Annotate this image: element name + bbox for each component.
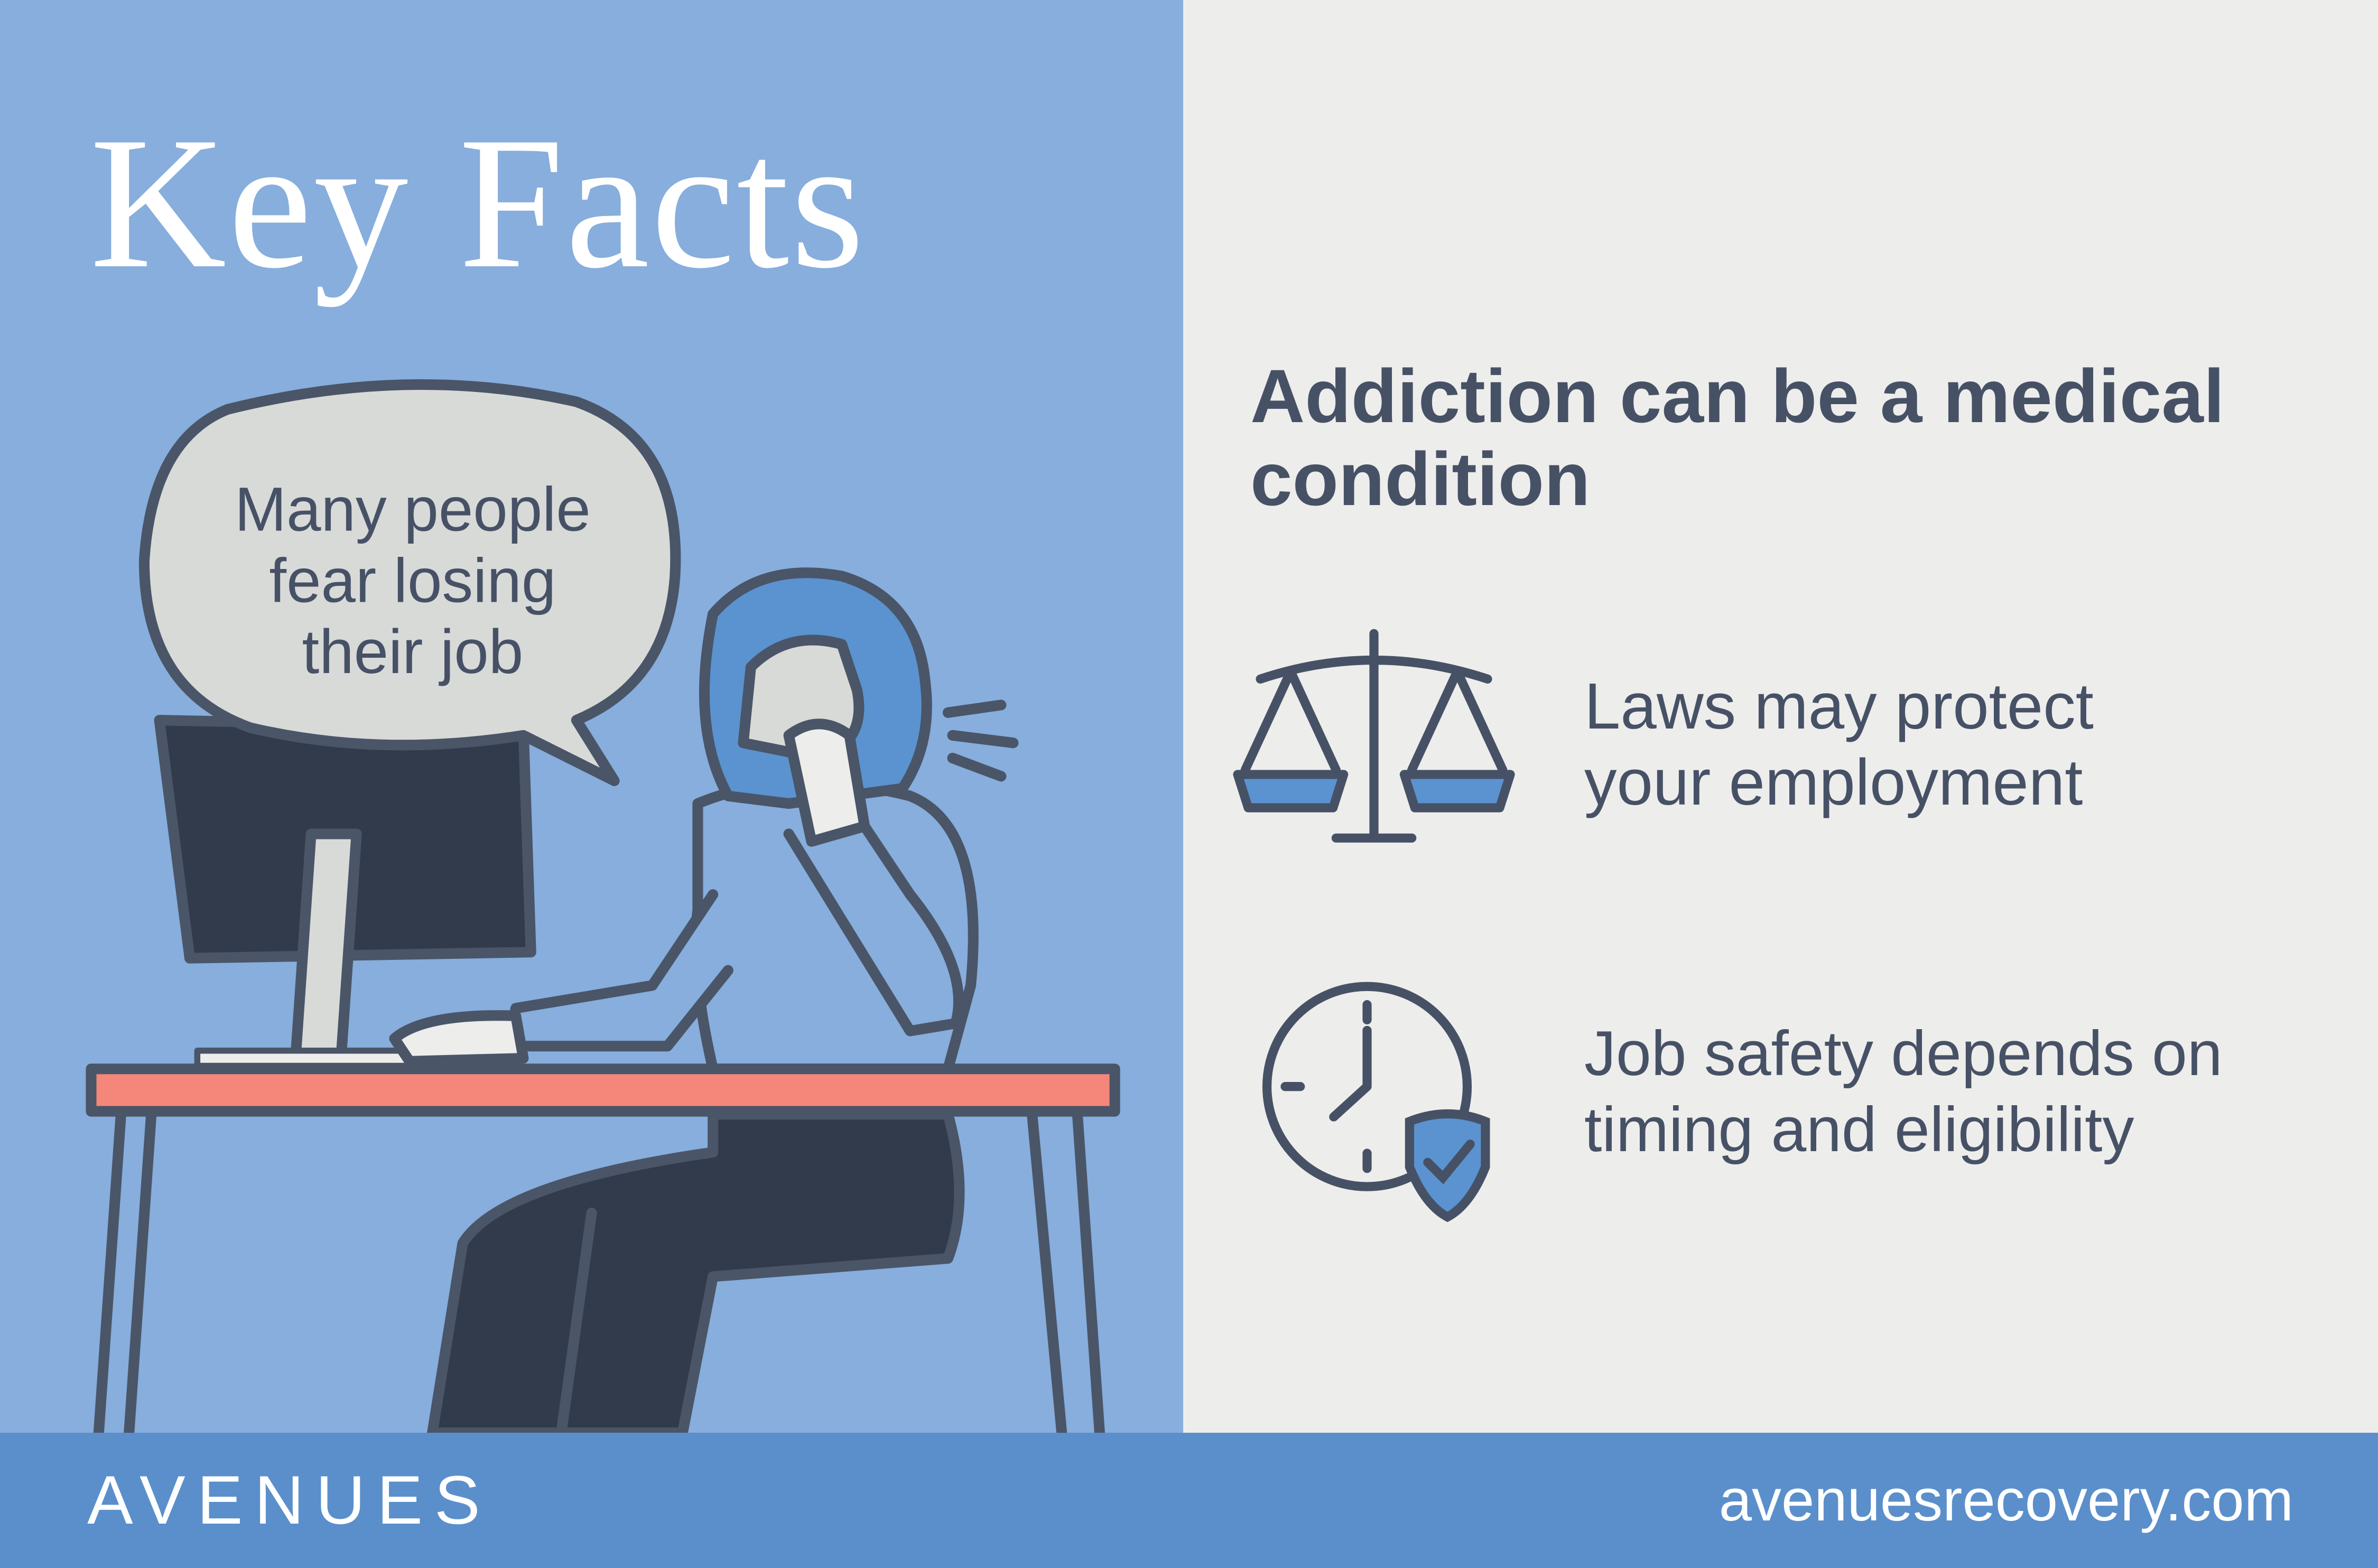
icon: clock with shield <box>1262 982 1490 1222</box>
footer bar <box>0 1433 2378 1568</box>
icon: scales of justice <box>1233 629 1515 843</box>
heading: addiction medical condition: condition <box>1250 437 1590 521</box>
illustration: person at desk <box>86 379 1120 1433</box>
text: laws may protect: your employment <box>1584 746 2083 819</box>
text: job safety: Job safety depends on <box>1584 1018 2223 1089</box>
footer url: avenuesrecovery.com <box>1719 1467 2293 1533</box>
text: laws may protect: Laws may protect <box>1584 670 2094 743</box>
heading: addiction medical condition <box>1250 354 2225 521</box>
heading: addiction medical condition: Addiction can be a medical <box>1250 354 2225 438</box>
speech bubble text: their job <box>302 617 523 686</box>
logo: AVENUES: AVENUES <box>87 1461 492 1538</box>
speech bubble text: Many people <box>235 474 591 544</box>
text: job safety <box>1584 1018 2223 1165</box>
speech bubble text <box>235 474 591 686</box>
speech bubble text: fear losing <box>269 545 556 615</box>
text: job safety: timing and eligibility <box>1584 1094 2134 1165</box>
panel: right light panel <box>1183 0 2378 1433</box>
panel: left blue illustration panel <box>0 0 1183 1433</box>
title: Key Facts <box>90 98 866 307</box>
text: laws may protect <box>1584 670 2094 819</box>
